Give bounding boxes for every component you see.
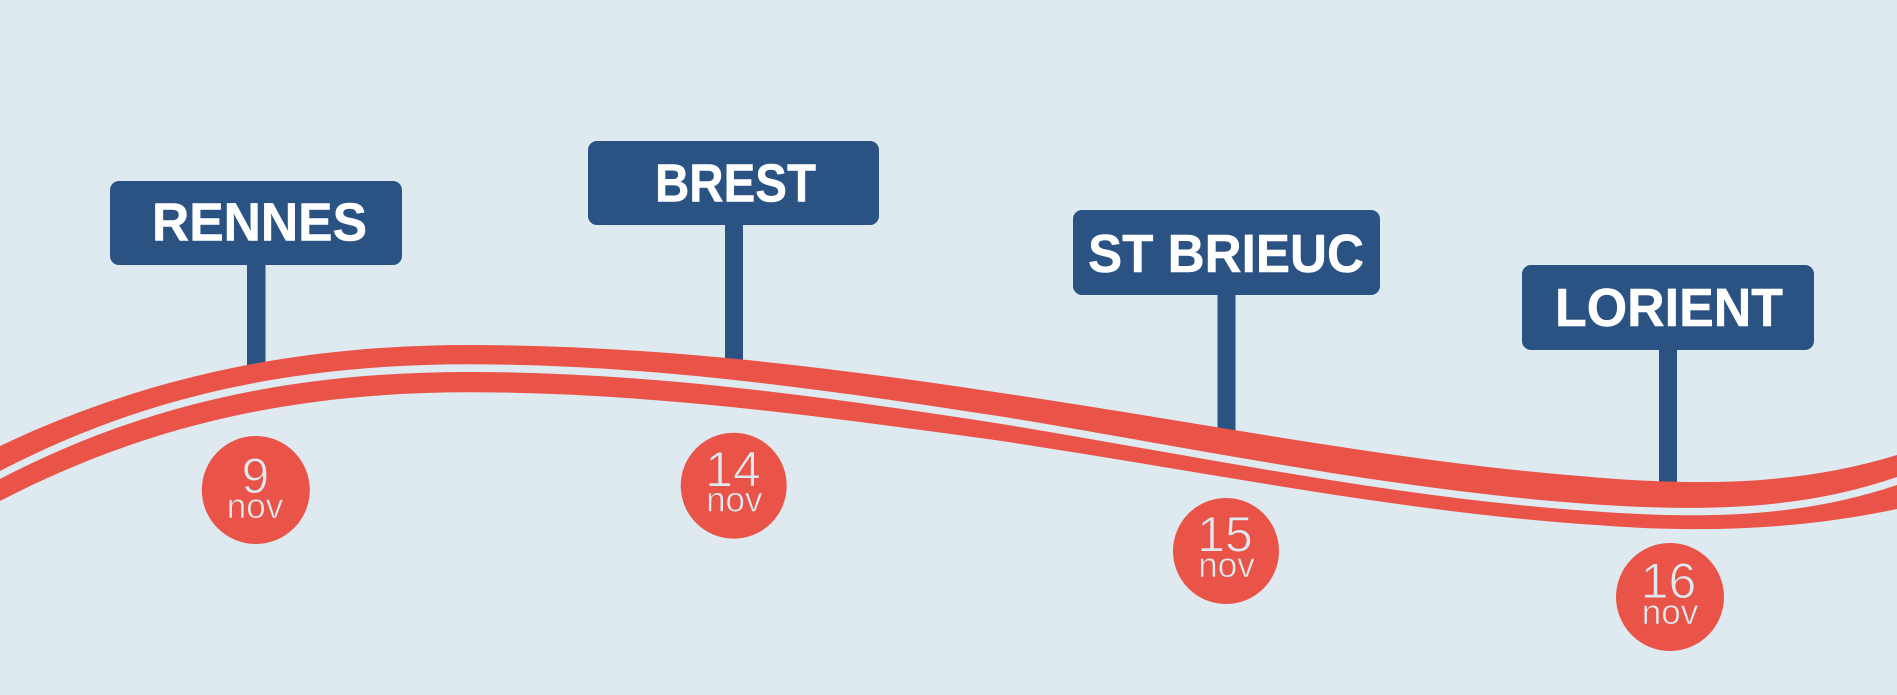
signpost: Brest [588,141,879,368]
post: Lorient [1659,345,1677,495]
city name: Brest: BREST [655,154,816,214]
city name: Lorient: LORIENT [1555,278,1783,338]
post: St Brieuc [1218,290,1236,440]
signpost: St Brieuc [1073,210,1380,440]
sign panel: St Brieuc [1073,210,1380,295]
signpost: Lorient [1522,265,1814,495]
date badge: 16 nov [1616,543,1724,651]
month: nov [1198,546,1255,585]
road: two red ribbons [0,345,1897,529]
month: nov [706,481,763,520]
date badge: 15 nov [1173,498,1279,604]
sign panel: Brest [588,141,879,225]
sign panel: Rennes [110,181,402,265]
date badge: 14 nov [681,433,787,539]
badge circle [202,436,310,544]
day number: 16 [1641,553,1696,609]
badge circle [1173,498,1279,604]
month: nov [227,487,284,526]
day number: 15 [1197,507,1253,563]
post: Rennes [247,260,266,372]
lower ribbon [0,372,1897,529]
day number: 9 [241,448,269,504]
month: nov [1642,593,1699,632]
badge circle [1616,543,1724,651]
city name: Rennes: RENNES [152,193,367,253]
date badge: 9 nov [202,436,310,544]
city name: St Brieuc: ST BRIEUC [1088,224,1364,284]
post: Brest [725,220,743,368]
sign panel: Lorient [1522,265,1814,350]
upper ribbon [0,345,1897,508]
day number: 14 [705,442,761,498]
signpost: Rennes [110,181,402,372]
badge circle [681,433,787,539]
